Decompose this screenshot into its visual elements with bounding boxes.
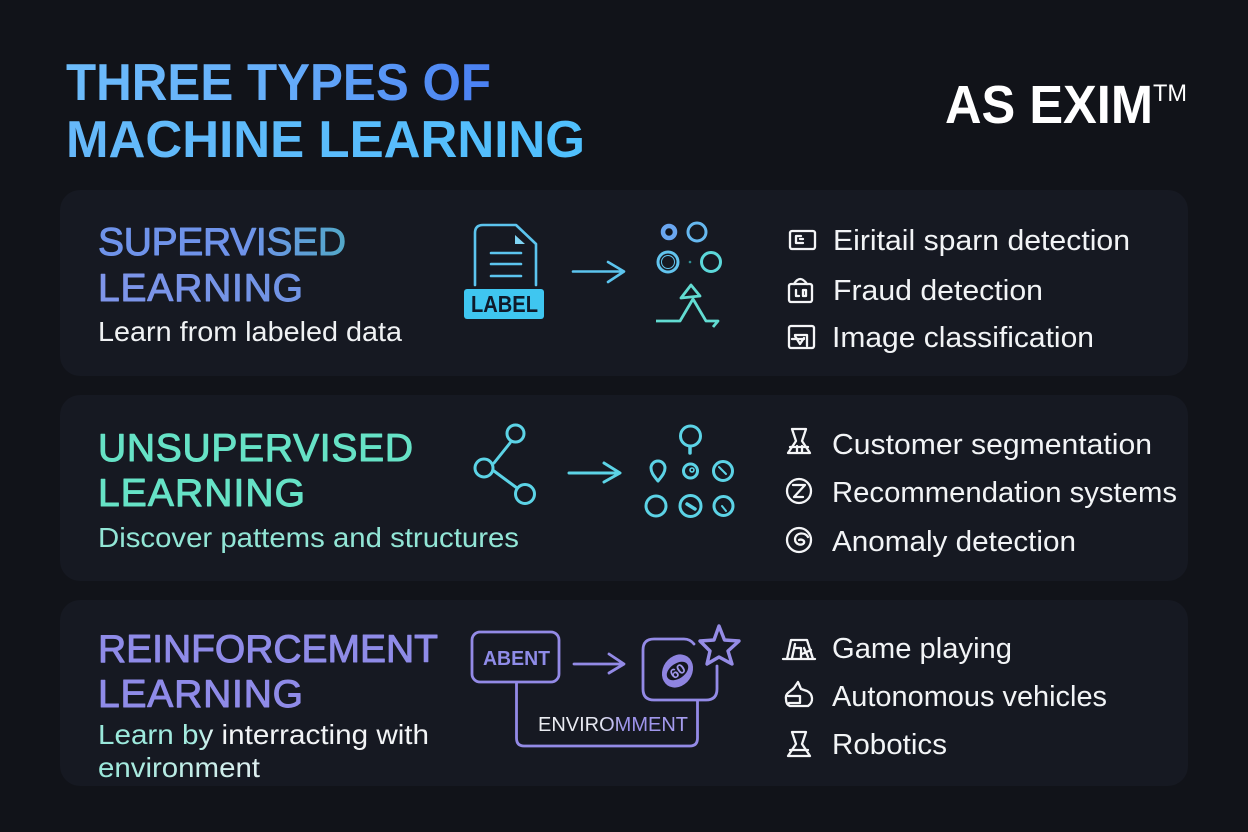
- environment label: ENVIROMMENT: [538, 714, 688, 736]
- icon: robot arm: [788, 732, 810, 756]
- panel: unsupervised learning: [60, 395, 1188, 581]
- arrow: [573, 262, 624, 282]
- diagram: agent and environment loop: [472, 626, 739, 746]
- brand logo: TM: [1153, 80, 1187, 107]
- icon: anomaly spiral: [787, 528, 811, 552]
- title: [66, 54, 585, 169]
- icon: image frame: [789, 326, 814, 348]
- agent box: [472, 632, 559, 682]
- item: game playing: Game playing: [832, 633, 1012, 665]
- use cases: unsupervised: [787, 429, 1177, 558]
- item: anomaly detection: Anomaly detection: [832, 526, 1076, 558]
- heading: reinforcement learning: REINFORCEMENT: [98, 628, 438, 671]
- heading: unsupervised learning: UNSUPERVISED: [98, 427, 413, 470]
- title: MACHINE LEARNING: [66, 111, 585, 169]
- icon: labeled document: [464, 225, 544, 319]
- icon: recommendation dial: [787, 479, 811, 503]
- icon: clusters: [646, 426, 733, 516]
- item: image classification: Image classification: [832, 322, 1094, 354]
- title: THREE TYPES OF: [66, 54, 491, 112]
- icon: vehicle: [786, 682, 812, 706]
- description: Discover pattems and structures: [98, 522, 519, 553]
- feedback loop: [516, 683, 698, 746]
- agent box: ABENT: [483, 648, 550, 670]
- item: spam detection: Eiritail sparn detection: [833, 225, 1130, 257]
- description: [98, 719, 429, 783]
- icon: spam mail: [790, 231, 815, 249]
- heading: reinforcement learning: LEARNING: [98, 673, 303, 716]
- icon: connected nodes: [475, 425, 534, 504]
- heading: supervised learning: LEARNING: [98, 267, 303, 310]
- arrow: [574, 654, 624, 673]
- state box with token: [643, 639, 717, 700]
- heading: reinforcement learning: [98, 628, 438, 716]
- item: fraud detection: Fraud detection: [833, 275, 1043, 307]
- icon: fraud bag: [789, 279, 812, 302]
- icon: game: [783, 640, 815, 659]
- item: autonomous vehicles: Autonomous vehicles: [832, 681, 1107, 713]
- heading: unsupervised learning: LEARNING: [98, 472, 305, 515]
- use cases: supervised: [789, 225, 1130, 354]
- heading: supervised learning: SUPERVISED: [98, 221, 346, 264]
- heading: supervised learning: [98, 221, 346, 310]
- state box with token: 60: [667, 660, 689, 682]
- icon: classified output: [656, 223, 720, 327]
- item: customer segmentation: Customer segmentation: [832, 429, 1152, 461]
- item: robotics: Robotics: [832, 729, 947, 761]
- icon: reward star: [700, 626, 739, 664]
- panel: reinforcement learning: [60, 600, 1188, 786]
- item: recommendation systems: Recommendation systems: [832, 477, 1177, 509]
- use cases: reinforcement: [783, 633, 1107, 761]
- icon: segmentation: [788, 429, 810, 453]
- heading: unsupervised learning: [98, 427, 413, 515]
- description: Learn by interracting with: [98, 719, 429, 750]
- description: Learn from labeled data: [98, 316, 402, 347]
- panel: supervised learning: [60, 190, 1188, 376]
- brand logo: AS EXIM: [945, 75, 1153, 135]
- icon: labeled document: LABEL: [471, 291, 538, 317]
- description: environment: [98, 752, 260, 783]
- arrow: [569, 463, 620, 482]
